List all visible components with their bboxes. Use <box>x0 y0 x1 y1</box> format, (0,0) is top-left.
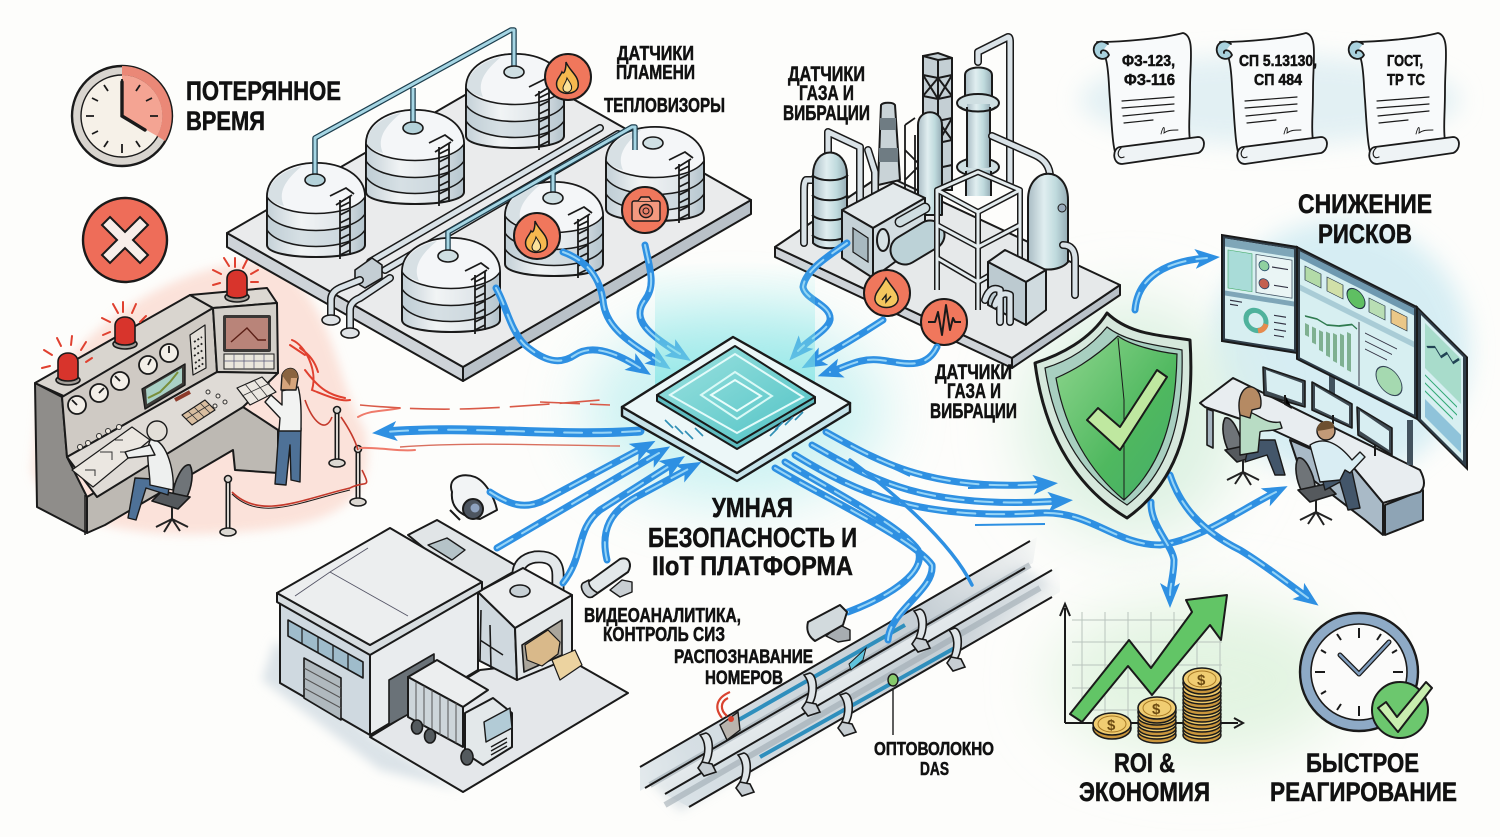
label: gas and vibration sensors lower: ГАЗА И <box>947 380 1001 403</box>
barrier posts <box>220 400 367 536</box>
sirens with rays <box>42 258 258 385</box>
label: video analytics: ВИДЕОАНАЛИТИКА, <box>584 605 741 627</box>
platform chip <box>622 262 850 481</box>
icon: vibration sensor <box>921 299 967 345</box>
steel frame <box>937 172 1020 310</box>
platform <box>775 174 1120 368</box>
document: federal laws: ФЗ-123, <box>1122 53 1175 70</box>
growth arrow <box>1070 595 1227 722</box>
glow beams <box>655 262 815 400</box>
label: flame sensors: ПЛАМЕНИ <box>616 62 695 84</box>
mid vessel with frame <box>905 112 942 215</box>
desk monitors <box>1263 367 1392 456</box>
icon: red cross <box>83 198 167 282</box>
label: fibre DAS: ОПТОВОЛОКНО <box>874 738 994 759</box>
label: thermal imagers: ТЕПЛОВИЗОРЫ <box>604 95 725 117</box>
heading: lost time: ПОТЕРЯННОЕ <box>186 76 341 106</box>
panel: monitoring room <box>1200 235 1467 535</box>
panel: control room console <box>35 258 415 536</box>
label: gas and vibration sensors lower: ДАТЧИКИ <box>935 361 1012 384</box>
fibre tag <box>849 648 898 735</box>
small utility box <box>985 250 1046 325</box>
front roof pipe <box>438 127 635 262</box>
chimney <box>878 103 900 185</box>
teal die <box>657 346 815 449</box>
desk <box>1200 378 1424 535</box>
keypads and controls <box>72 377 276 487</box>
label: risk reduction: СНИЖЕНИЕ <box>1298 189 1432 219</box>
icon: green shield <box>1035 313 1191 518</box>
chart: ROI growth <box>1060 595 1243 743</box>
pipe clamps <box>698 609 965 796</box>
label: video analytics: КОНТРОЛЬ СИЗ <box>603 624 725 646</box>
back tanks <box>267 54 564 259</box>
label: ROI and savings: ROI & <box>1114 748 1175 778</box>
data flows from the platform to outcomes <box>775 258 1308 640</box>
label: gas and vibration sensors top: ГАЗА И <box>799 82 854 105</box>
wall screen right <box>1417 307 1467 469</box>
coin stacks: $ <box>1107 717 1116 734</box>
label: gas and vibration sensors lower <box>930 361 1017 423</box>
main building <box>277 528 482 735</box>
label: ROI and savings <box>1079 748 1210 807</box>
platform <box>227 66 751 381</box>
icon: flame sensor top <box>545 54 591 100</box>
panel: warehouse and truck <box>277 520 628 792</box>
label: fast response <box>1270 748 1457 807</box>
label: number recognition <box>674 647 813 689</box>
gauges <box>68 344 178 414</box>
document: building codes: СП 484 <box>1254 72 1302 89</box>
seated operator <box>125 421 192 532</box>
panel: refinery unit <box>775 37 1120 368</box>
coin stacks: $ <box>1197 672 1206 689</box>
document: federal laws: ФЗ-116 <box>1124 72 1175 89</box>
icon: fast response clock <box>1300 613 1432 738</box>
contact traces <box>665 412 803 439</box>
label: fibre DAS <box>874 738 994 779</box>
operator seated left <box>1223 387 1285 485</box>
icon: thermal camera <box>622 187 668 233</box>
label: gas and vibration sensors lower: ВИБРАЦИИ <box>930 400 1017 423</box>
standing operator <box>265 369 301 485</box>
icon: lost-time clock <box>72 66 172 166</box>
platform title <box>648 492 857 581</box>
document: standards <box>1349 33 1459 164</box>
alarm waves <box>290 340 415 450</box>
document: building codes: СП 5.13130, <box>1239 53 1317 70</box>
truck <box>408 660 512 765</box>
side switch panel <box>190 325 206 375</box>
main double pipeline <box>322 128 618 338</box>
icon: dome camera <box>450 475 497 520</box>
document: standards: ГОСТ, <box>1387 53 1423 70</box>
right vessel <box>1028 174 1075 295</box>
grid <box>1072 612 1222 720</box>
icon: gas sensor <box>864 270 910 316</box>
label: risk reduction <box>1298 189 1432 249</box>
console body <box>35 288 278 535</box>
lattice tower <box>923 53 952 190</box>
label: fibre DAS: DAS <box>920 758 949 779</box>
label: gas and vibration sensors top: ВИБРАЦИИ <box>783 102 870 125</box>
heading: lost time <box>186 76 341 136</box>
icon: pipeline camera <box>807 605 850 642</box>
heading: lost time: ВРЕМЯ <box>186 106 265 136</box>
label: risk reduction: РИСКОВ <box>1318 219 1412 249</box>
icon: bullet camera <box>581 558 632 597</box>
annex <box>478 557 582 680</box>
main column and pipes <box>957 37 1050 196</box>
axes <box>1060 604 1243 728</box>
coin stacks <box>1093 668 1221 743</box>
label: flame sensors: ДАТЧИКИ <box>617 43 694 65</box>
platform title: УМНАЯ <box>712 492 793 523</box>
panel: pipelines with fibre <box>640 537 1060 807</box>
icon: flame sensor front <box>514 213 560 259</box>
operator seated right <box>1296 421 1365 525</box>
red trend screen <box>223 315 274 369</box>
document: federal laws <box>1094 33 1204 164</box>
wall screen left <box>1222 235 1297 353</box>
rear roof pipe <box>305 30 524 186</box>
document: standards: ТР ТС <box>1387 72 1425 89</box>
document: building codes <box>1217 33 1327 164</box>
yard <box>370 660 628 792</box>
chip base <box>622 337 850 481</box>
wall screen centre <box>1297 247 1417 419</box>
label: ROI and savings: ЭКОНОМИЯ <box>1079 777 1210 807</box>
label: fast response: РЕАГИРОВАНИЕ <box>1270 777 1457 807</box>
left sphere column <box>804 132 860 248</box>
front tanks <box>402 127 704 334</box>
support columns <box>1332 370 1410 465</box>
platform title: IIoT ПЛАТФОРМА <box>652 551 853 581</box>
platform title: БЕЗОПАСНОСТЬ И <box>648 522 857 553</box>
central box unit <box>842 150 925 278</box>
leak sensor <box>717 692 740 740</box>
label: flame sensors <box>616 43 695 84</box>
label: video analytics <box>584 605 741 646</box>
label: fast response: БЫСТРОЕ <box>1306 748 1419 778</box>
data flows from sites to the platform <box>360 243 937 583</box>
panel: tank farm <box>227 30 751 381</box>
label: gas and vibration sensors top <box>783 63 870 125</box>
green process screen <box>142 364 185 409</box>
label: number recognition: РАСПОЗНАВАНИЕ <box>674 647 813 668</box>
horizontal drum <box>877 208 930 251</box>
label: number recognition: НОМЕРОВ <box>705 668 783 689</box>
back roof <box>408 520 520 592</box>
coin stacks: $ <box>1152 701 1161 718</box>
label: gas and vibration sensors top: ДАТЧИКИ <box>788 63 865 86</box>
